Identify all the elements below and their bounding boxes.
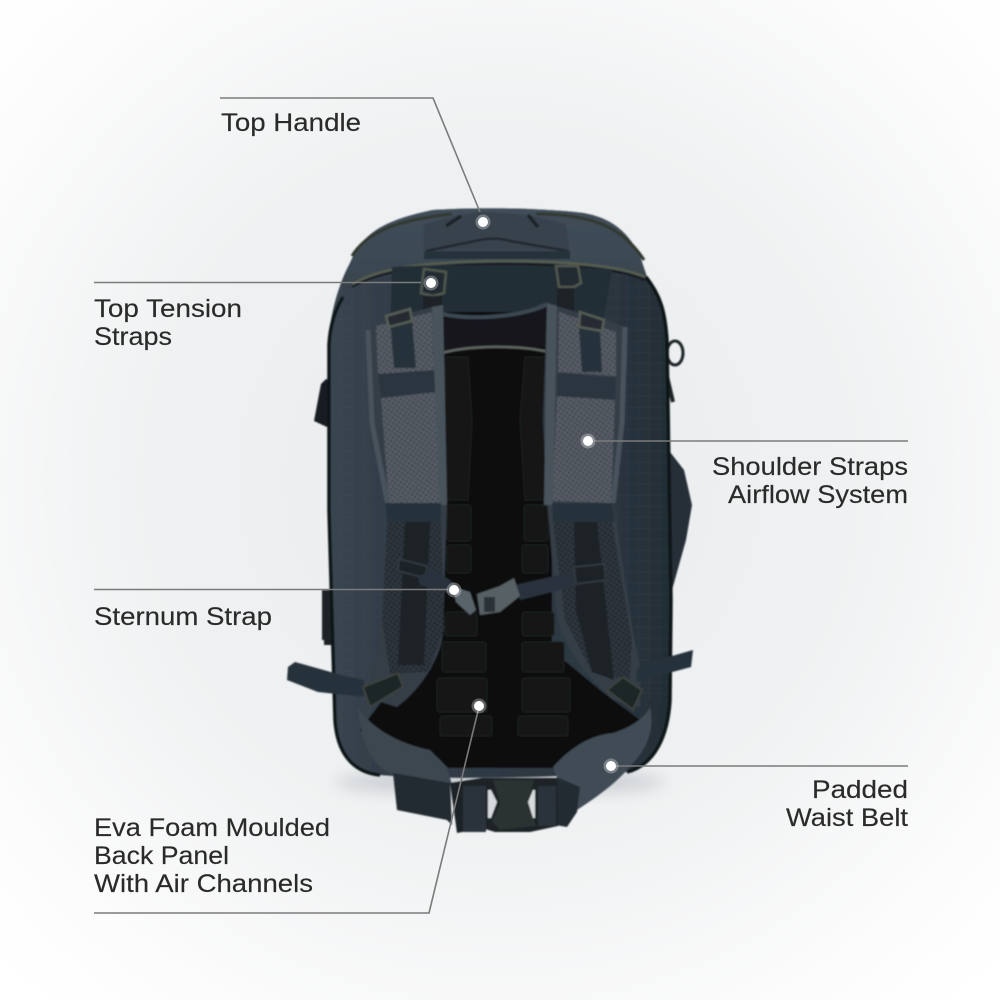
lower left compression strap: [322, 590, 334, 645]
leader line: foam back panel: [94, 711, 478, 913]
label: eva foam back panel: Eva Foam Moulded: [94, 814, 330, 842]
tension webbing: [423, 288, 574, 318]
leader line: top tension straps: [94, 282, 421, 284]
label: top tension straps: Top Tension: [94, 295, 242, 323]
top handle: [423, 212, 570, 250]
olive seam: [352, 261, 645, 284]
back panel dark: [360, 312, 640, 768]
label: shoulder straps airflow system: Shoulder Straps: [712, 453, 908, 481]
leader line: shoulder straps: [594, 440, 908, 442]
side d-ring: [666, 341, 683, 402]
bag body: [328, 208, 671, 778]
label: top tension straps: [94, 295, 242, 351]
top center panel: [390, 265, 612, 330]
left strap buckle: [386, 309, 412, 327]
piping dark edges: [329, 277, 671, 775]
foam channels: [437, 357, 570, 736]
backpack photo illustration: [287, 208, 693, 833]
foam panel rim: [442, 347, 549, 353]
waist buckle: [450, 778, 558, 833]
label: eva foam back panel: [94, 814, 330, 898]
label: top tension straps: Straps: [94, 323, 172, 351]
leader line: sternum strap: [94, 588, 448, 590]
waist belt left wing: [358, 708, 452, 785]
hip adjuster right: [607, 650, 693, 710]
flag label: [666, 600, 672, 620]
leader line: top handle: [220, 98, 480, 212]
top panel: [346, 208, 646, 283]
ground shadow: [335, 770, 665, 794]
left shoulder strap: [368, 305, 447, 707]
right shoulder strap: [543, 303, 640, 707]
side pocket right: [670, 452, 692, 590]
label: top handle: Top Handle: [221, 109, 361, 137]
label: padded waist belt: Waist Belt: [786, 804, 908, 832]
waist webbing: [393, 773, 580, 827]
label: eva foam back panel: With Air Channels: [94, 870, 313, 898]
waist belt right wing: [553, 707, 651, 810]
label: shoulder straps airflow system: [712, 453, 908, 509]
leader line: waist belt: [616, 765, 908, 767]
label: shoulder straps airflow system: Airflow System: [728, 481, 908, 509]
side tab left: [314, 379, 332, 427]
label: eva foam back panel: Back Panel: [94, 842, 229, 870]
upper back mesh: [440, 306, 550, 352]
label: padded waist belt: [786, 776, 908, 832]
zipper line: [352, 214, 644, 260]
label: sternum strap: Sternum Strap: [94, 603, 272, 631]
tension strap buckles: [421, 266, 581, 296]
sternum strap: [398, 559, 606, 615]
hip adjuster left: [287, 662, 403, 707]
marker dots: [424, 214, 618, 774]
label: padded waist belt: Padded: [812, 776, 908, 804]
ripstop fabric: [328, 260, 669, 700]
right strap buckle: [579, 312, 604, 331]
